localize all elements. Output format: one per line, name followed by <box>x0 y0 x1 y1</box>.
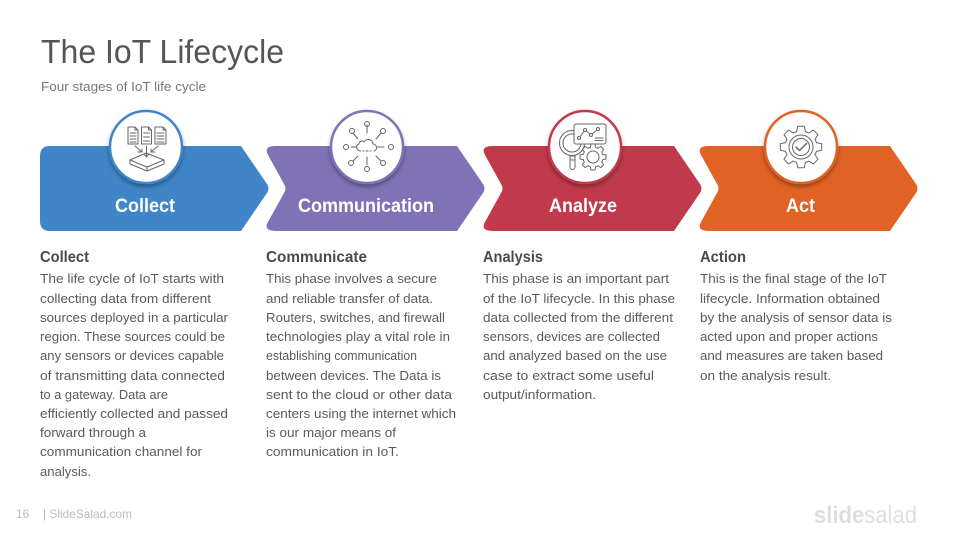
heading: Analysis: Analysis <box>483 249 543 266</box>
body: communicate <box>266 271 456 459</box>
body: communicate: and reliable transfer of data. <box>266 291 433 306</box>
body: communicate: is our major means of <box>266 425 396 440</box>
body: analysis: data collected from the different <box>483 310 673 325</box>
body: analysis: sensors, devices are collected <box>483 329 660 344</box>
text block: collect <box>40 249 229 479</box>
body: collect: of transmitting data connected <box>40 368 225 383</box>
body: analysis: of the IoT lifecycle. In this phase <box>483 291 675 306</box>
arrow label: Act: Act <box>786 196 816 217</box>
arrow label: Analyze: Analyze <box>549 196 617 217</box>
panel: collect arrow <box>40 146 268 231</box>
body: communicate: centers using the internet which <box>266 406 456 421</box>
text block: analysis <box>483 249 675 402</box>
body: action: by the analysis of sensor data is <box>700 310 893 325</box>
arrow label: Collect: Collect <box>115 196 176 217</box>
heading: Collect: Collect <box>40 249 89 266</box>
body: collect: region. These sources could be <box>40 329 225 344</box>
panel: communication arrow <box>267 146 484 231</box>
body: collect: The life cycle of IoT starts with <box>40 271 224 286</box>
body: action: acted upon and proper actions <box>700 329 878 344</box>
body: analysis: output/information. <box>483 387 596 402</box>
body: collect <box>40 271 229 479</box>
body: collect: sources deployed in a particular <box>40 310 229 325</box>
body: communicate: technologies play a vital role in <box>266 329 450 344</box>
body: action: lifecycle. Information obtained <box>700 291 880 306</box>
body: collect: efficiently collected and passed <box>40 406 228 421</box>
body: communicate: Routers, switches, and firewall <box>266 310 445 325</box>
body: communicate: communication in IoT. <box>266 444 399 459</box>
icon: collect documents into box <box>110 111 182 183</box>
panel: analyze arrow <box>484 146 702 231</box>
body: collect: communication channel for <box>40 444 203 459</box>
body: analysis: case to extract some useful <box>483 368 654 383</box>
logo: slidesalad: slidesalad <box>814 502 917 529</box>
heading: Action: Action <box>700 249 746 266</box>
text block: communicate <box>266 249 456 459</box>
subtitle: Four stages of IoT life cycle <box>41 79 206 94</box>
icon: cloud network <box>331 111 403 183</box>
body: communicate: between devices. The Data is <box>266 368 442 383</box>
body: collect: to a gateway. Data are <box>40 387 168 402</box>
body: action <box>700 271 893 383</box>
arrow label: Communication: Communication <box>298 196 434 217</box>
heading: Communicate: Communicate <box>266 249 367 266</box>
body: collect: forward through a <box>40 425 147 440</box>
icon: gear with check <box>765 111 837 183</box>
body: communicate: This phase involves a secure <box>266 271 437 286</box>
body: action: This is the final stage of the IoT <box>700 271 887 286</box>
footer: page number: 16 <box>16 507 30 521</box>
body: analysis <box>483 271 675 402</box>
text block: action <box>700 249 893 383</box>
body: action: on the analysis result. <box>700 368 831 383</box>
body: analysis: and analyzed based on the use <box>483 348 667 363</box>
footer: site name: | SlideSalad.com <box>43 507 132 521</box>
body: action: and measures are taken based <box>700 348 883 363</box>
icon: magnifier, chart and gear <box>549 111 621 183</box>
panel: act arrow <box>700 146 918 231</box>
body: communicate: establishing communication <box>266 348 417 363</box>
body: analysis: This phase is an important part <box>483 271 669 286</box>
body: communicate: sent to the cloud or other data <box>266 387 453 402</box>
body: collect: collecting data from different <box>40 291 211 306</box>
body: collect: analysis. <box>40 464 91 479</box>
title: The IoT Lifecycle <box>41 33 284 70</box>
body: collect: any sensors or devices capable <box>40 348 224 363</box>
